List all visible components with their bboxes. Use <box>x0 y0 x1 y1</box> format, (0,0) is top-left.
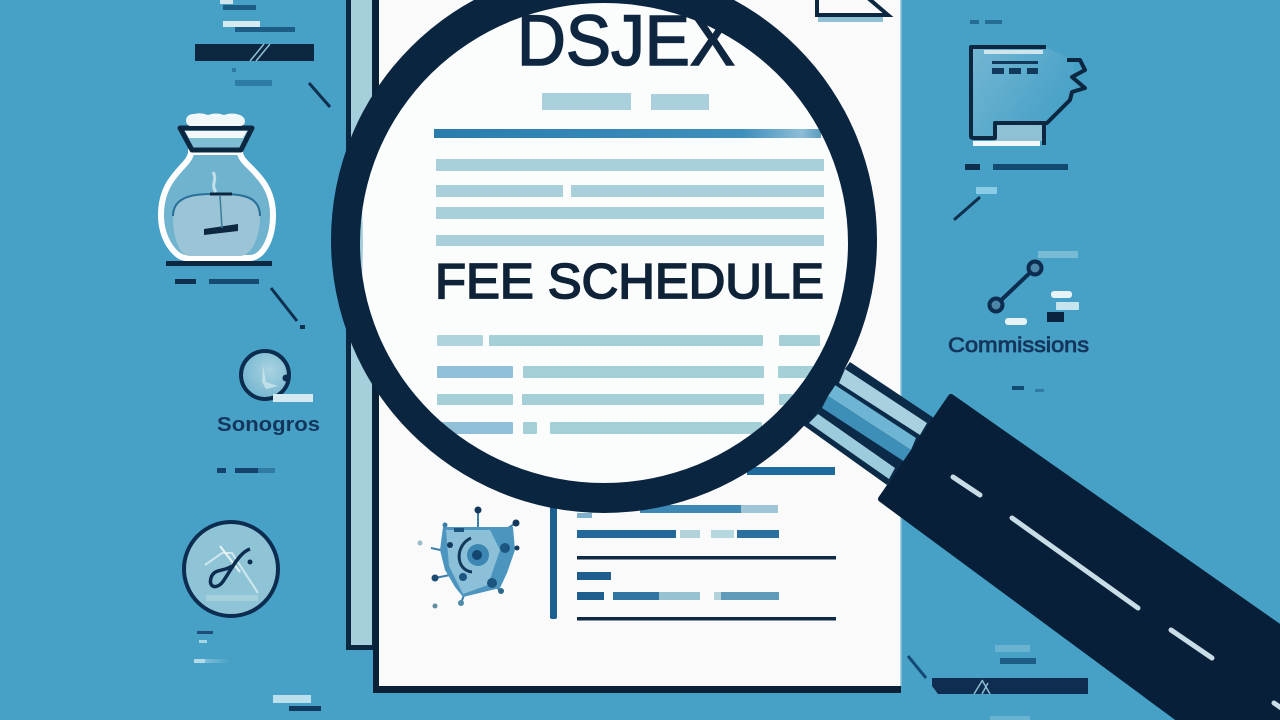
upper text rows <box>436 159 824 246</box>
commissions sub-bars <box>1012 386 1044 392</box>
arrow: pointer to jar <box>309 83 330 107</box>
left column: lower legend bars <box>194 631 321 711</box>
title: DSJEX: DSJEX <box>517 2 735 81</box>
panel: magnified document content <box>434 2 824 434</box>
magnifier handle <box>803 362 1280 720</box>
heading: fee schedule: FEE SCHEDULE <box>435 255 824 309</box>
icon: receipt card <box>971 47 1085 146</box>
label: sonogros: Sonogros <box>217 413 320 436</box>
arrow: pointer from jar <box>271 288 305 329</box>
icon: jar <box>161 113 273 284</box>
bottom right legend bars <box>932 645 1088 720</box>
arrow: pointer to bottom bar <box>908 656 926 678</box>
arrow: pointer from receipt <box>955 187 997 219</box>
header rule <box>434 129 821 138</box>
subtitle bars <box>542 93 709 110</box>
lens edge reflection <box>355 170 363 320</box>
lens glass <box>358 1 850 485</box>
panel: back page <box>346 0 386 650</box>
table: lower document rows <box>550 467 836 620</box>
receipt sub-bars <box>965 164 1068 170</box>
icon: commissions nodes <box>990 251 1079 325</box>
sonogros sub-bars <box>217 468 275 473</box>
handle grip <box>881 397 1280 720</box>
grip highlights <box>953 477 1280 714</box>
icon: virus shield <box>418 506 520 608</box>
icon: sonogros circle <box>241 351 313 402</box>
label: commissions: Commissions <box>948 334 1089 357</box>
right column: top bars <box>970 20 1002 24</box>
handle neck <box>803 362 934 485</box>
lower text rows <box>437 335 820 434</box>
icon: fee circle <box>184 522 278 616</box>
panel: fee document <box>373 0 902 693</box>
left column: top legend bars <box>195 0 314 86</box>
magnifier ring <box>331 0 877 513</box>
icon: document corner triangle <box>817 0 888 22</box>
